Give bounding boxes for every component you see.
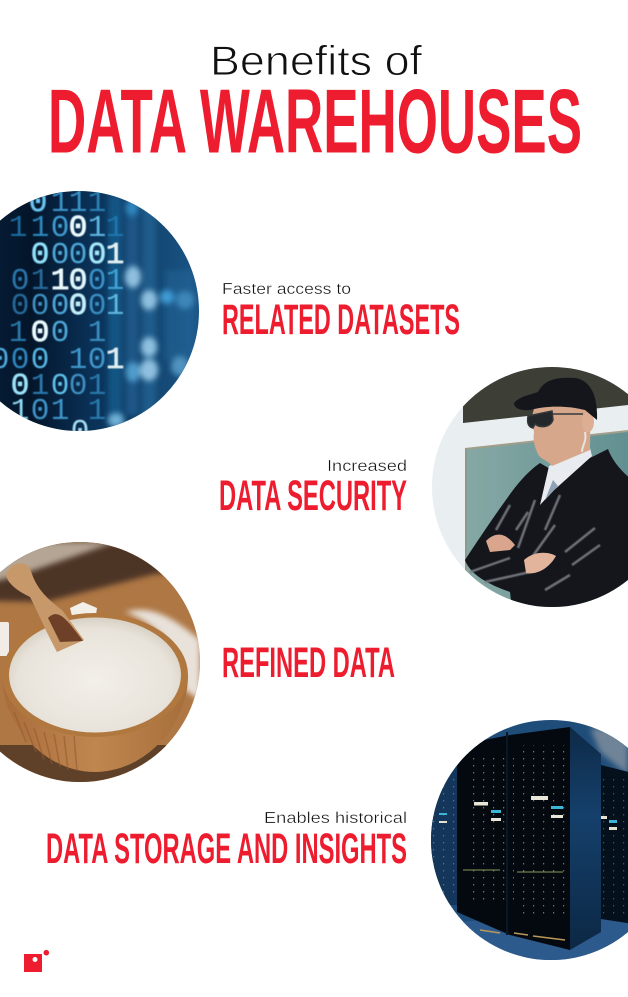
photo: binary digits: 1 bbox=[106, 238, 124, 273]
photo: binary digits: 0 bbox=[69, 211, 87, 246]
logo bbox=[24, 950, 49, 972]
photo: binary digits: 1 bbox=[51, 186, 69, 221]
title bbox=[48, 37, 582, 172]
photo: binary digits: 1 bbox=[69, 186, 87, 221]
photo: binary digits: 0 bbox=[71, 415, 89, 450]
photo: binary digits: 0 bbox=[88, 264, 106, 299]
heading: refined data: REFINED DATA bbox=[222, 639, 395, 687]
photo: binary digits: 1 bbox=[106, 264, 124, 299]
rack: status lights bbox=[463, 796, 565, 940]
photo: binary digits: 0 bbox=[88, 289, 106, 324]
photo: binary digits: 0 bbox=[88, 238, 106, 273]
photo: binary digits: 0 bbox=[31, 289, 49, 324]
photo: binary digits: 0 bbox=[51, 238, 69, 273]
photo: binary digits: 0 bbox=[69, 238, 87, 273]
rack: right background bbox=[601, 765, 628, 925]
photo: binary digits: 1 bbox=[9, 316, 27, 351]
photo: binary digits: 1 bbox=[31, 369, 49, 404]
bowl ribs bbox=[14, 712, 77, 771]
photo: binary digits: 1 bbox=[11, 394, 29, 429]
photo: binary digits: 1 bbox=[51, 394, 69, 429]
title line: Benefits of: Benefits of bbox=[210, 37, 422, 84]
photo: binary digits: 0 bbox=[69, 289, 87, 324]
guard: cap bbox=[514, 378, 597, 420]
sugar cubes bbox=[70, 602, 97, 616]
photo: binary digits: 1 bbox=[9, 211, 27, 246]
text block: data storage and insights bbox=[46, 810, 407, 873]
photo: binary digits: 1 bbox=[69, 343, 87, 378]
photo: binary digits: 0 bbox=[69, 264, 87, 299]
photo: sugar bowl bbox=[0, 542, 200, 790]
photo: server racks bbox=[431, 720, 628, 965]
photo: binary digits: 0 bbox=[11, 289, 29, 324]
photo: binary digits: 0 bbox=[51, 316, 69, 351]
caption: increased: Increased bbox=[327, 458, 407, 475]
photo: binary digits: 0 bbox=[88, 343, 106, 378]
photo: binary digits: 0 bbox=[31, 394, 49, 429]
photo: binary digits: 1 bbox=[88, 316, 106, 351]
photo: binary digits: 1 bbox=[51, 264, 69, 299]
photo: binary digits: 1 bbox=[31, 264, 49, 299]
caption: faster access to: Faster access to bbox=[222, 281, 351, 298]
photo: binary digits: 0 bbox=[51, 211, 69, 246]
photo: binary digits: 1 bbox=[88, 186, 106, 221]
photo: binary digits: 1 bbox=[106, 343, 124, 378]
photo: binary digits: 0 bbox=[11, 343, 29, 378]
rack: side panel bbox=[570, 727, 601, 950]
guard: jacket bbox=[465, 449, 628, 610]
photo: binary digits: 1 bbox=[106, 289, 124, 324]
photo: binary digits bbox=[0, 186, 199, 450]
photo: binary digits: 0 bbox=[31, 316, 49, 351]
photo: binary digits: 0 bbox=[11, 369, 29, 404]
photo: binary digits: 1 bbox=[88, 369, 106, 404]
photo: binary digits: 1 bbox=[88, 394, 106, 429]
photo: security guard bbox=[432, 367, 628, 610]
guard: folded hands bbox=[486, 535, 515, 552]
text block: data security bbox=[219, 458, 407, 520]
guard: sunglasses bbox=[528, 411, 583, 428]
guard: collar and tie bbox=[540, 448, 592, 505]
heading: data security: DATA SECURITY bbox=[219, 472, 407, 520]
photo: binary digits: 0 bbox=[31, 343, 49, 378]
caption: enables historical: Enables historical bbox=[264, 810, 407, 827]
text block: related datasets bbox=[222, 281, 460, 344]
photo: binary digits: 0 bbox=[51, 369, 69, 404]
rack: left background bbox=[431, 758, 457, 905]
wooden bowl bbox=[2, 675, 188, 772]
photo: binary digits: 1 bbox=[88, 211, 106, 246]
photo: binary digits: 0 bbox=[51, 289, 69, 324]
wooden scoop bbox=[6, 563, 84, 652]
photo: binary digits: 1 bbox=[31, 211, 49, 246]
photo: binary digits: 1 bbox=[106, 211, 124, 246]
photo: binary digits: 0 bbox=[31, 238, 49, 273]
photo: binary digits: 0 bbox=[69, 369, 87, 404]
rack: centre cabinets bbox=[457, 727, 570, 950]
guard: face and neck bbox=[531, 405, 590, 466]
photo: binary digits: 0 bbox=[11, 264, 29, 299]
photo: binary digits: 0 bbox=[29, 186, 47, 221]
sugar bbox=[9, 618, 181, 732]
